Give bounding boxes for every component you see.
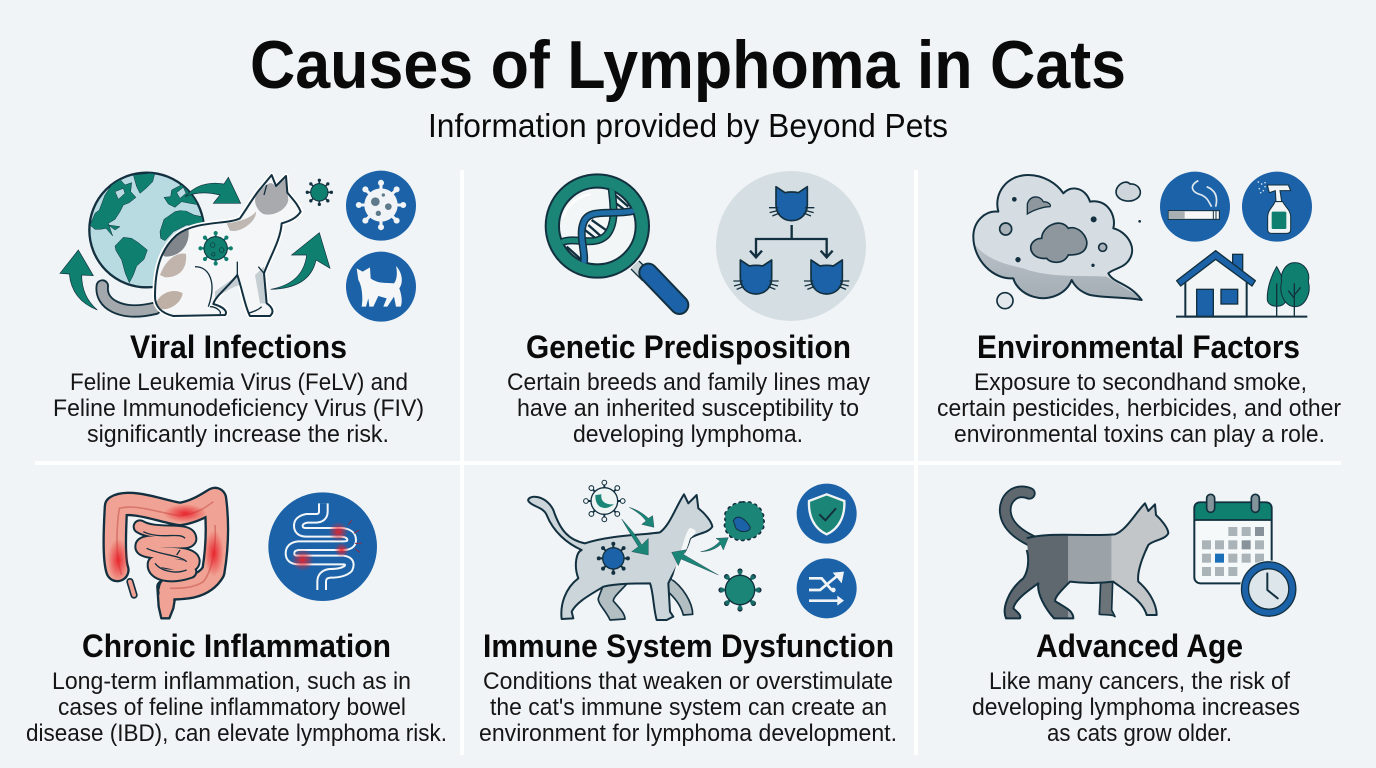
- icon: house: [1177, 251, 1255, 317]
- description: Exposure to secondhand smoke,: [974, 369, 1307, 396]
- subtitle: Information provided by Beyond Pets: [428, 107, 948, 144]
- illustration: cat and immune cells: [528, 483, 857, 620]
- icon: arrow right: [271, 233, 330, 289]
- icon: blue virus badge: [346, 171, 416, 241]
- icon: smoke cloud: [970, 175, 1150, 309]
- panel: viral infections: [53, 171, 424, 448]
- icon: shield badge: [797, 484, 857, 544]
- icon: virus in cat: [200, 233, 231, 264]
- description: significantly increase the risk.: [87, 421, 389, 448]
- icon: calendar: [1194, 494, 1272, 583]
- description: developing lymphoma.: [573, 421, 803, 448]
- description: [972, 668, 1300, 747]
- illustration: intestines: [105, 492, 377, 618]
- icon: shuffle badge: [797, 558, 857, 618]
- panel: genetic predisposition: [507, 171, 870, 448]
- icon: teal virus: [721, 571, 759, 609]
- description: as cats grow older.: [1047, 720, 1232, 747]
- heading: Viral Infections: [130, 329, 347, 365]
- icon: spray bottle badge: [1242, 172, 1312, 242]
- icon: arrow left: [60, 250, 97, 310]
- icon: sitting cat: [102, 175, 301, 316]
- icon: small virus: [307, 180, 331, 204]
- description: cases of feline inflammatory bowel: [58, 694, 406, 721]
- icon: grey cat: [528, 494, 712, 620]
- description: certain pesticides, herbicides, and other: [937, 395, 1341, 422]
- icon: blue virus: [599, 544, 628, 573]
- illustration: DNA and family tree: [552, 171, 866, 321]
- heading: Advanced Age: [1036, 628, 1243, 664]
- description: [937, 369, 1341, 448]
- panel: environmental factors: [937, 172, 1341, 448]
- panel: chronic inflammation: [26, 492, 447, 747]
- icon: trees: [1176, 263, 1309, 317]
- panel: immune system dysfunction: [479, 483, 897, 747]
- icon: globe: [89, 173, 205, 287]
- icon: white virus: [586, 483, 623, 519]
- description: [53, 369, 424, 448]
- description: Feline Leukemia Virus (FeLV) and: [70, 369, 408, 396]
- panel: advanced age: [972, 482, 1300, 747]
- description: the cat's immune system can create an: [490, 694, 887, 721]
- description: [26, 668, 447, 747]
- description: [479, 668, 897, 747]
- icon: blue cat badge: [346, 252, 416, 322]
- description: [507, 369, 870, 448]
- illustration: smoke, toxins and home: [970, 172, 1312, 317]
- icon: inflamed intestines: [105, 499, 224, 618]
- icon: clock: [1243, 564, 1294, 614]
- description: environment for lymphoma development.: [479, 720, 897, 747]
- illustration: globe, cat and viruses: [60, 171, 416, 322]
- description: developing lymphoma increases: [972, 694, 1300, 721]
- icon: blue intestine badge: [268, 492, 377, 601]
- icon: magnifying glass: [552, 181, 679, 305]
- heading: Chronic Inflammation: [82, 628, 391, 664]
- heading: Genetic Predisposition: [526, 329, 851, 365]
- icon: arrow top: [185, 177, 241, 203]
- description: Feline Immunodeficiency Virus (FIV): [53, 395, 424, 422]
- illustration: aging cat and calendar: [993, 482, 1294, 622]
- icon: immune arrows: [622, 507, 728, 575]
- icon: teal blob cell: [726, 503, 763, 539]
- title: Causes of Lymphoma in Cats: [250, 27, 1126, 103]
- description: disease (IBD), can elevate lymphoma risk.: [26, 720, 447, 747]
- heading: Immune System Dysfunction: [483, 628, 894, 664]
- description: Long-term inflammation, such as in: [52, 668, 411, 695]
- description: have an inherited susceptibility to: [517, 395, 859, 422]
- icon: cat family tree: [716, 171, 866, 321]
- icon: three-tone cat: [998, 486, 1170, 620]
- heading: Environmental Factors: [977, 329, 1300, 365]
- icon: cigarette badge: [1160, 172, 1230, 242]
- description: Certain breeds and family lines may: [507, 369, 870, 396]
- description: Conditions that weaken or overstimulate: [483, 668, 893, 695]
- description: environmental toxins can play a role.: [954, 421, 1325, 448]
- description: Like many cancers, the risk of: [989, 668, 1290, 695]
